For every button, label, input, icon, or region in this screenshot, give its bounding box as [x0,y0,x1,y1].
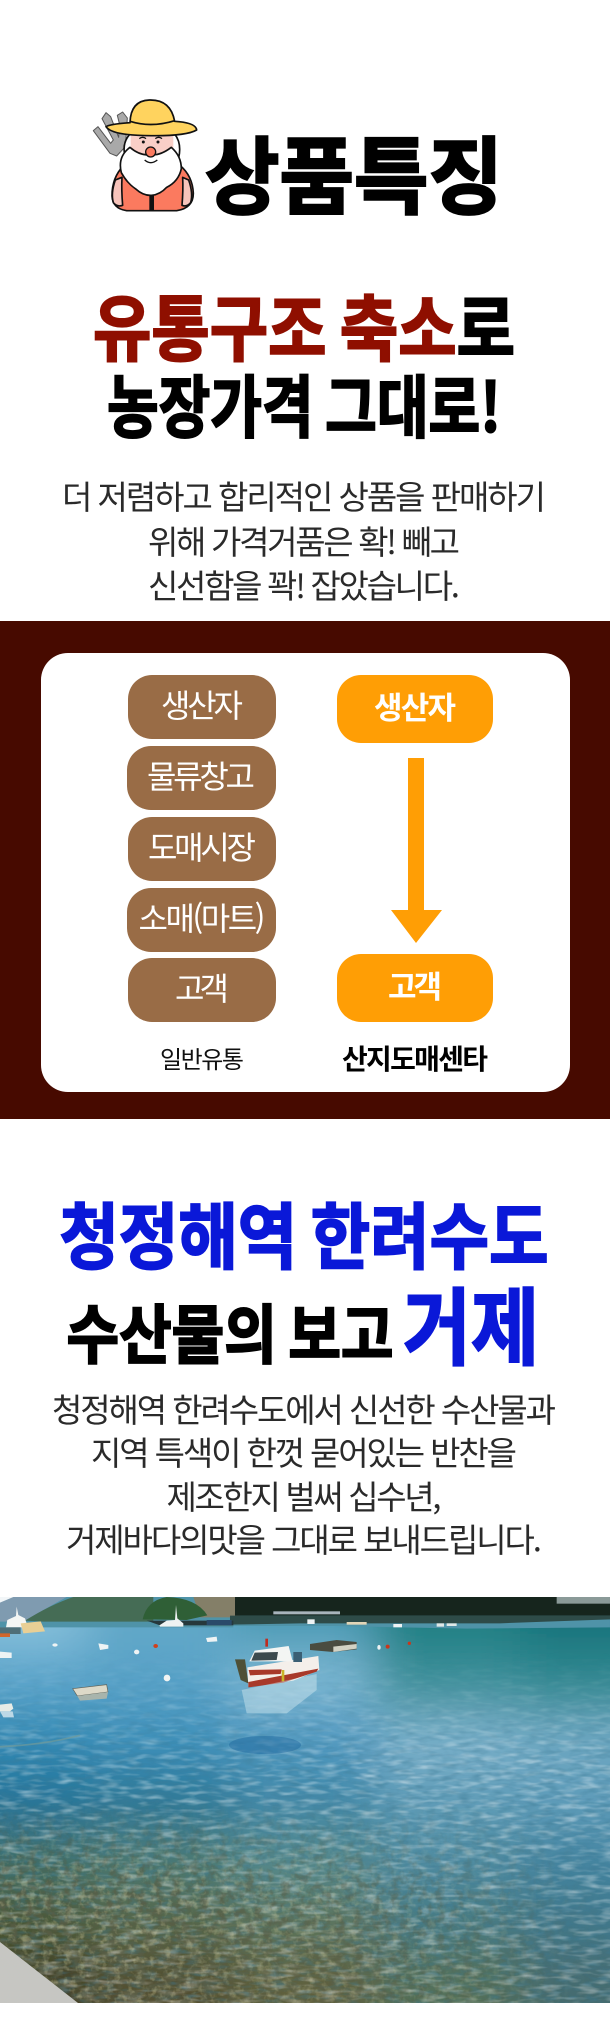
icon: white beard [120,147,181,195]
column: sanji wholesale center: 산지도매센타 [342,1038,488,1078]
column: general distribution: 생산자 [161,681,243,727]
column: sanji wholesale center [337,675,493,1078]
paragraph: geoje sea: 거제바다의맛을 그대로 보내드립니다. [66,1514,542,1562]
paragraph: fresh and reasonable: 위해 가격거품은 확! 빼고 [148,516,460,564]
column: sanji wholesale center: 고객 [388,962,442,1007]
icon: farmer hair and face [124,134,180,158]
boat [235,1639,319,1713]
photo: clear sea at geoje with a boat [0,1597,610,2003]
paragraph: geoje sea [52,1384,556,1562]
column: sanji wholesale center: 생산자 [374,683,456,728]
column: general distribution: 소매(마트) [138,894,266,940]
concrete quay [0,1942,78,2003]
icon: pitchfork [93,112,127,156]
heading: clean sea: 청정해역 한려수도 [60,1179,548,1284]
shadow under boat [229,1736,301,1754]
left ferry [0,1607,45,1637]
column: general distribution: 물류창고 [147,752,255,798]
paragraph: fresh and reasonable: 신선함을 꽉! 잡았습니다. [148,560,460,608]
water colour field [0,1626,610,2003]
icon: farmer mascot [93,100,197,211]
column: general distribution: 일반유통 [160,1040,244,1075]
title: 상품특징 [205,111,503,232]
paragraph: geoje sea: 제조한지 벌써 십수년, [166,1471,442,1519]
paragraph: geoje sea: 지역 특색이 한껏 묻어있는 반찬을 [91,1427,517,1475]
paragraph: fresh and reasonable: 더 저렴하고 합리적인 상품을 판매하기 [62,471,546,519]
heading line: seafood: 거제 [403,1262,539,1383]
arrow [391,758,442,943]
photo detail: shore, boats and buoys (3x local coords) [0,1597,610,1747]
icon: face details [139,137,162,163]
moored pontoons [0,1640,357,1717]
heading line 2: 농장가격 그대로! [107,353,501,452]
heading line: seafood [66,1262,539,1383]
heading line 1: 유통구조 축소로 [93,271,515,376]
pebbles on the sea floor [0,1812,564,2003]
water ripples [0,1674,610,2003]
icon: straw hat [106,100,197,136]
column: general distribution [127,675,276,1075]
paragraph: fresh and reasonable [62,471,546,608]
column: general distribution: 고객 [175,964,229,1010]
panel: comparison card [41,653,570,1092]
rope in the water [0,1735,80,1747]
buoys [52,1619,411,1681]
column: general distribution: 도매시장 [148,823,256,869]
heading line: seafood: 수산물의 보고 [66,1285,394,1377]
panel: distribution band [0,621,610,1119]
paragraph: geoje sea: 청정해역 한려수도에서 신선한 수산물과 [52,1384,556,1432]
far shore [0,1597,610,1629]
icon: farmer arms and vest [112,165,193,211]
